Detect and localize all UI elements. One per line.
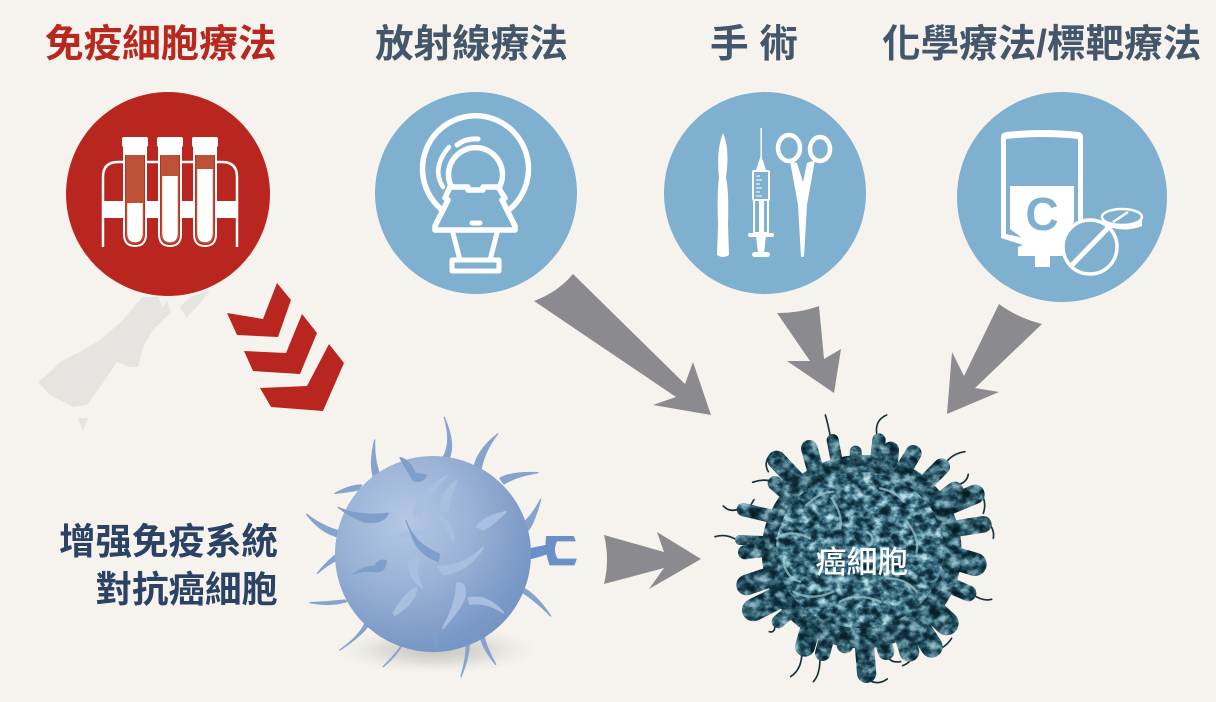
drip bag — [1001, 130, 1083, 267]
outer tendrils and claw receptor — [307, 417, 576, 677]
thin tails — [715, 415, 994, 683]
decorative map silhouette — [38, 290, 210, 431]
arrow: immune cell to cancer cell — [604, 532, 701, 589]
icon: red circle with test tubes — [66, 92, 270, 296]
arrow: chemotherapy to cancer cell — [947, 304, 1042, 414]
scanner — [423, 116, 529, 271]
test tube rack — [102, 162, 238, 247]
heading: radiotherapy: 放射線療法 — [375, 23, 568, 66]
scissors — [778, 135, 830, 257]
tablet pill — [1102, 209, 1142, 230]
immune cell text label: 增强免疫系統 — [59, 521, 278, 562]
syringe — [748, 128, 774, 257]
icon: blue circle with MRI scanner — [375, 92, 577, 294]
scalpel — [717, 133, 729, 257]
heading: surgery: 手 術 — [710, 23, 798, 66]
letter C: C — [1025, 188, 1059, 240]
arrow: radiotherapy to cancer cell — [534, 274, 711, 415]
label: 癌細胞 — [816, 545, 908, 580]
heading: chemotherapy and targeted therapy: 化學療法/標靶療法 — [882, 23, 1201, 66]
red chevron arrows — [227, 283, 344, 411]
heading: immunotherapy: 免疫細胞療法 — [45, 23, 276, 66]
surface tendrils — [338, 458, 506, 650]
fibrous highlights — [777, 488, 917, 602]
icon: blue circle with surgical tools — [664, 92, 866, 294]
immune cell illustration — [307, 417, 576, 680]
cell body — [776, 472, 944, 628]
test tubes — [122, 137, 218, 246]
round pill — [1063, 220, 1117, 274]
icon: blue circle with chemo drip bag and pills — [957, 92, 1167, 302]
immune cell text label — [59, 521, 278, 610]
cancer cell illustration — [715, 415, 994, 683]
arrow: surgery to cancer cell — [777, 306, 841, 393]
spikes — [740, 440, 983, 673]
immune cell text label: 對抗癌細胞 — [96, 569, 278, 610]
